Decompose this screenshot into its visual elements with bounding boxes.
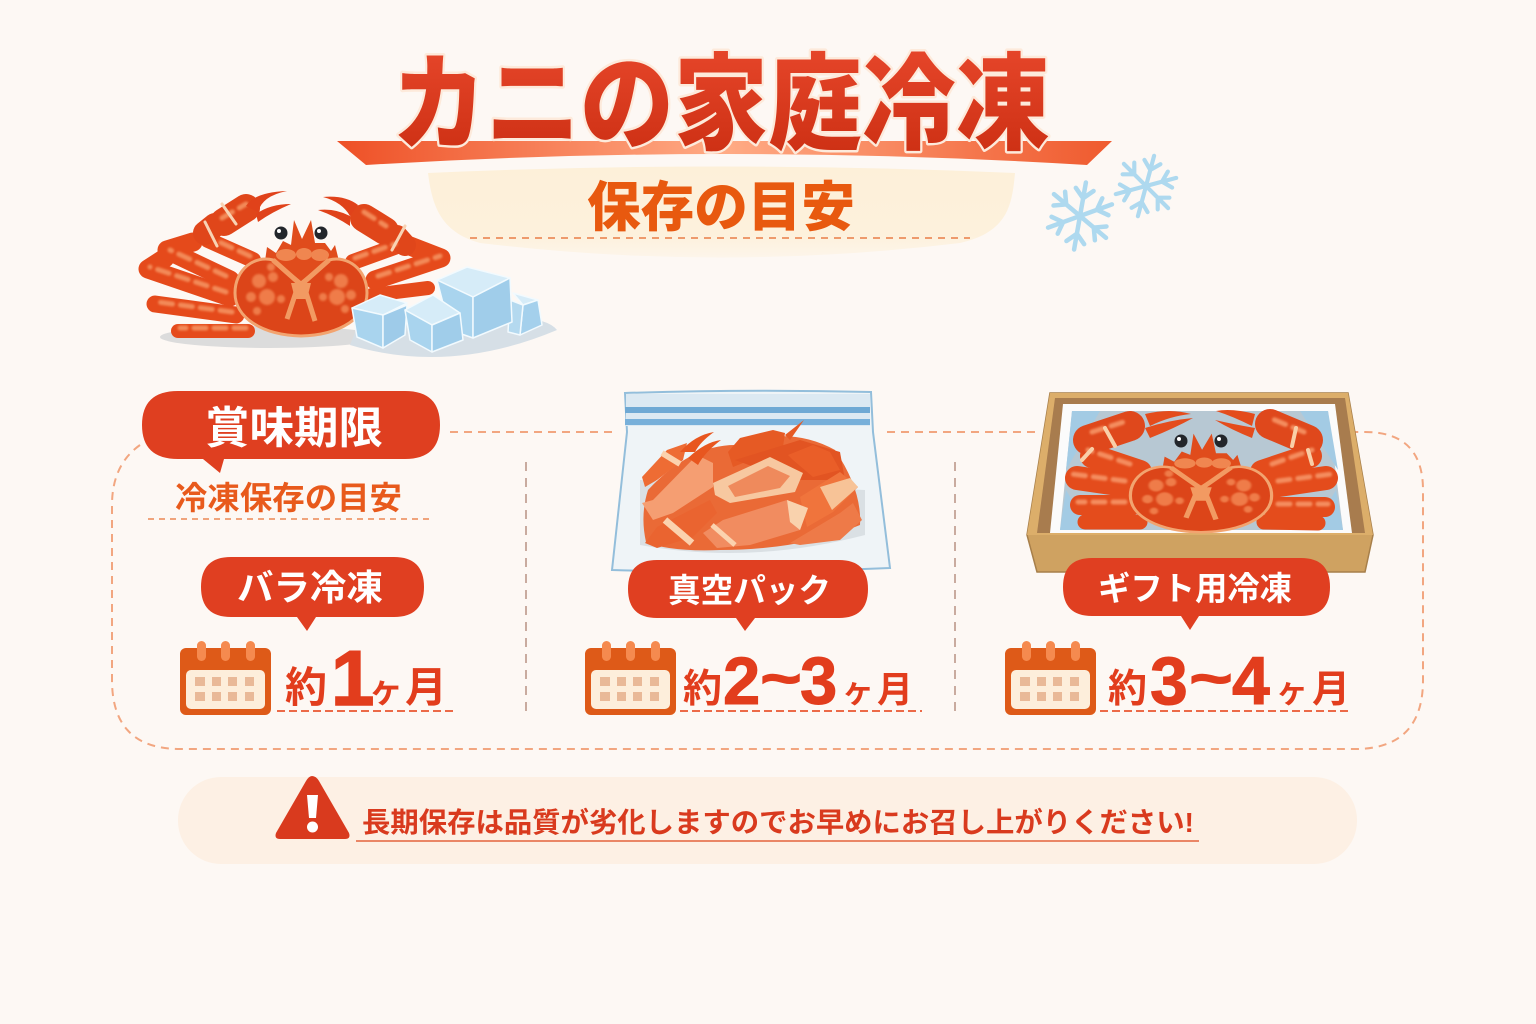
- duration: about 3 to 4 months: 月: [1312, 669, 1350, 711]
- icon: snowflakes: [1041, 148, 1184, 255]
- label pill: vacuum pack: 真空パック: [668, 572, 831, 609]
- duration: about 3 to 4 months: 4: [1232, 643, 1270, 719]
- subtitle: 保存の目安: [587, 178, 855, 238]
- duration: about 1 month: 約: [285, 664, 327, 711]
- heading: frozen storage guide: 冷凍保存の目安: [175, 480, 402, 516]
- column dividers: [526, 462, 955, 715]
- column 2: vacuum pack: [585, 560, 922, 719]
- illustration: gift box crab: [1027, 393, 1373, 572]
- icon: calendar: [585, 641, 676, 715]
- duration: about 2 to 3 months: ヶ: [842, 673, 874, 709]
- title: カニの家庭冷凍: [392, 47, 1050, 164]
- warning text: 長期保存は品質が劣化しますのでお早めにお召し上がりください!: [362, 806, 1194, 838]
- subtitle plate: [428, 166, 1015, 258]
- icon: warning triangle: [276, 776, 350, 839]
- label pill: bulk frozen: バラ冷凍: [237, 567, 383, 608]
- duration: about 1 month: ヶ: [369, 672, 403, 710]
- duration: about 2 to 3 months: 月: [877, 669, 913, 710]
- duration: about 3 to 4 months: ヶ: [1276, 673, 1308, 709]
- duration: about 2 to 3 months: 約: [683, 668, 722, 711]
- column 1: bulk frozen: [180, 557, 454, 722]
- column 3: gift frozen: [1005, 558, 1352, 719]
- icon: calendar: [180, 641, 271, 715]
- duration: about 2 to 3 months: ~: [761, 650, 801, 708]
- illustration: crab with ice cubes: [148, 191, 557, 357]
- badge: best before: [142, 391, 440, 473]
- panel: dashed outline: [112, 432, 1423, 749]
- duration: about 3 to 4 months: 3: [1150, 643, 1188, 719]
- label pill: gift frozen: ギフト用冷凍: [1098, 570, 1292, 607]
- duration: about 3 to 4 months: [1100, 643, 1352, 719]
- warning bar: [178, 776, 1357, 864]
- duration: about 1 month: 1: [331, 634, 374, 722]
- duration: about 1 month: 月: [405, 664, 447, 711]
- label pill: bulk frozen: [201, 557, 424, 631]
- title ribbon: [337, 141, 1112, 165]
- duration: about 3 to 4 months: 約: [1108, 668, 1147, 711]
- duration: about 3 to 4 months: ~: [1190, 650, 1232, 708]
- illustration: vacuum bag: [612, 391, 890, 572]
- duration: about 1 month: [277, 634, 454, 722]
- label pill: vacuum pack: [628, 560, 868, 631]
- badge: best before: 賞味期限: [205, 404, 383, 453]
- duration: about 2 to 3 months: 3: [800, 644, 837, 719]
- label pill: gift frozen: [1063, 558, 1330, 630]
- duration: about 2 to 3 months: [680, 644, 922, 719]
- duration: about 2 to 3 months: 2: [723, 644, 760, 719]
- icon: calendar: [1005, 641, 1096, 715]
